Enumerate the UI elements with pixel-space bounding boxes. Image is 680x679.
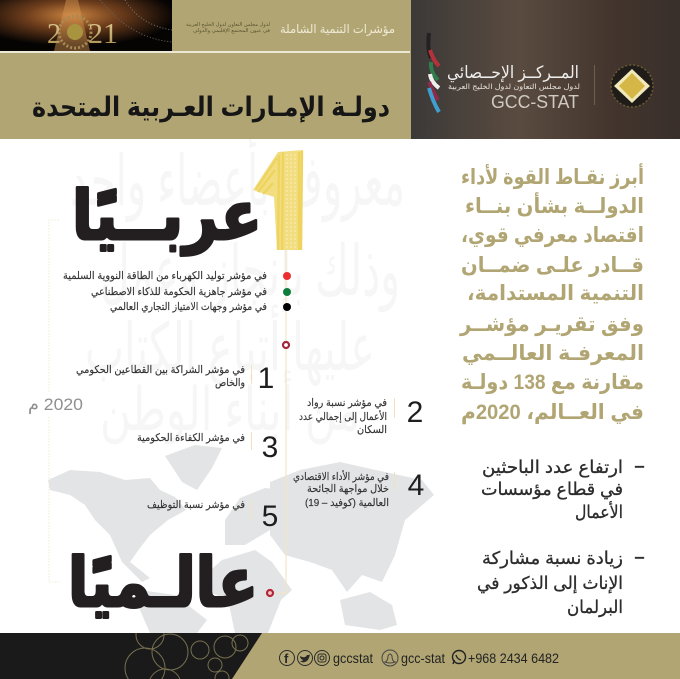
logo: GCC-STAT: GCC-STAT bbox=[491, 92, 579, 112]
timeline line bbox=[277, 250, 286, 593]
footer: social icons bbox=[280, 650, 330, 666]
header: 2021 image: 2 bbox=[47, 19, 61, 50]
bullet: parliament bbox=[477, 548, 644, 617]
bullet: researchers: الأعمال bbox=[575, 501, 623, 522]
footer: dark band bbox=[0, 633, 262, 679]
heading: world rank: عالـميًا bbox=[68, 545, 258, 621]
item 2: 2 bbox=[407, 396, 423, 429]
calligraphy background: وذلك بإنجاز وعمل bbox=[100, 232, 400, 313]
timeline end ring bbox=[267, 590, 273, 596]
intro paragraph: في العــالم، 2020م bbox=[461, 401, 644, 424]
item 5 bbox=[147, 499, 278, 533]
header: report name: مؤشرات التنمية الشاملة bbox=[280, 22, 395, 37]
item 2 bbox=[299, 396, 423, 436]
item 1 bbox=[76, 362, 274, 395]
calligraphy background bbox=[70, 133, 405, 445]
intro paragraph: مقارنة مع 138 دولـة bbox=[461, 371, 644, 394]
header: GCC-STAT panel bbox=[411, 0, 680, 139]
label: 2020 bbox=[24, 392, 86, 416]
item 4: خلال مواجهة الجائحة bbox=[307, 483, 389, 495]
label: 2020: 2020 م bbox=[28, 395, 83, 414]
item 3: في مؤشر الكفاءة الحكومية bbox=[137, 432, 245, 444]
item 4: 4 bbox=[408, 469, 424, 502]
item 2: في مؤشر نسبة رواد bbox=[307, 397, 387, 409]
footer: social icons: f bbox=[284, 651, 289, 666]
title: دولـة الإمـارات العـربية المتحدة bbox=[32, 92, 390, 123]
item 2: السكان bbox=[357, 424, 387, 436]
item 1: والخاص bbox=[215, 377, 245, 389]
calligraphy background: معروف بأعضاء واحد bbox=[70, 133, 405, 223]
dotted bracket 2020 bbox=[49, 220, 59, 582]
logo: ribbon bbox=[428, 33, 439, 112]
bullet: researchers: في قطاع مؤسسات bbox=[481, 479, 623, 500]
arab rank: bullets bbox=[283, 272, 291, 311]
bullet: parliament: البرلمان bbox=[567, 597, 623, 617]
calligraphy background: عليها أتباع الكتاب bbox=[85, 304, 375, 386]
calligraphy background: من أبناء الوطن bbox=[100, 370, 360, 445]
logo divider bbox=[594, 65, 595, 105]
item 3: 3 bbox=[262, 431, 278, 464]
intro paragraph: وفق تقريـر مؤشــر bbox=[459, 313, 644, 336]
header: report subtitle: لدول مجلس التعاون لدول الخليج العربية bbox=[186, 22, 270, 28]
item 1: 1 bbox=[258, 362, 274, 395]
logo: arabic name: المــركــز الإحــصائي bbox=[447, 63, 579, 83]
bullet: parliament: زيادة نسبة مشاركة bbox=[482, 548, 623, 568]
intro paragraph: التنمية المستدامة، bbox=[467, 282, 644, 305]
item 3 bbox=[137, 431, 278, 464]
header: report subtitle bbox=[186, 22, 271, 34]
bullet: researchers bbox=[481, 457, 644, 522]
world map bbox=[48, 445, 434, 633]
bullet: parliament: الإناث إلى الذكور في bbox=[477, 573, 623, 594]
icon: whatsapp bbox=[452, 650, 466, 664]
footer: phone number: +968 2434 6482 bbox=[468, 650, 559, 666]
header: report subtitle: في عيون المجتمع الإقليمي والدولي bbox=[193, 28, 271, 34]
footer: gold band bbox=[232, 633, 680, 679]
item 4: العالمية (كوفيد – 19) bbox=[305, 497, 389, 509]
icon: snapchat bbox=[382, 650, 398, 666]
number 1 (yellow scribble) bbox=[253, 150, 303, 250]
heading: arab rank: عربــيًا bbox=[72, 178, 262, 256]
header: 2021 image bbox=[0, 0, 172, 51]
logo: arabic subtitle: لدول مجلس التعاون لدول الخليج العربية bbox=[448, 82, 580, 91]
intro paragraph: الدولــة بشأن بنــاء bbox=[465, 191, 644, 218]
bullet: researchers: ارتفاع عدد الباحثين bbox=[482, 457, 623, 478]
arab rank: list: في مؤشر جاهزية الحكومة للذكاء الاصطناعي bbox=[91, 286, 267, 298]
icon: GCC emblem bbox=[611, 65, 653, 107]
arab rank: list: في مؤشر توليد الكهرباء من الطاقة النووية السلمية bbox=[63, 270, 267, 282]
item 4: في مؤشر الأداء الاقتصادي bbox=[293, 470, 389, 483]
header: white divider bbox=[0, 51, 410, 53]
item 5: 5 bbox=[262, 500, 278, 533]
intro paragraph: أبرز نقـاط القوة لأداء bbox=[461, 162, 644, 189]
intro paragraph: المعرفـة العالــمي bbox=[462, 342, 644, 365]
intro paragraph bbox=[459, 162, 644, 424]
header: left gold band bbox=[0, 0, 411, 139]
header: 2021 image: 21 bbox=[88, 19, 118, 50]
intro paragraph: اقتصاد معرفي قوي، bbox=[461, 224, 644, 248]
item 1: في مؤشر الشراكة بين القطاعين الحكومي bbox=[76, 364, 245, 376]
footer: gccstat handle: gccstat bbox=[333, 650, 373, 666]
item 5: في مؤشر نسبة التوظيف bbox=[147, 499, 245, 511]
arab rank: list: في مؤشر وجهات الامتياز التجاري العالمي bbox=[110, 301, 267, 313]
arab rank: list bbox=[63, 270, 267, 313]
timeline ring bbox=[283, 342, 289, 348]
item 4 bbox=[293, 469, 424, 509]
footer: snapchat handle: gcc-stat bbox=[401, 650, 445, 666]
item 2: الأعمال إلى إجمالي عدد bbox=[299, 410, 387, 423]
intro paragraph: قــادر علـى ضمــان bbox=[461, 254, 644, 277]
